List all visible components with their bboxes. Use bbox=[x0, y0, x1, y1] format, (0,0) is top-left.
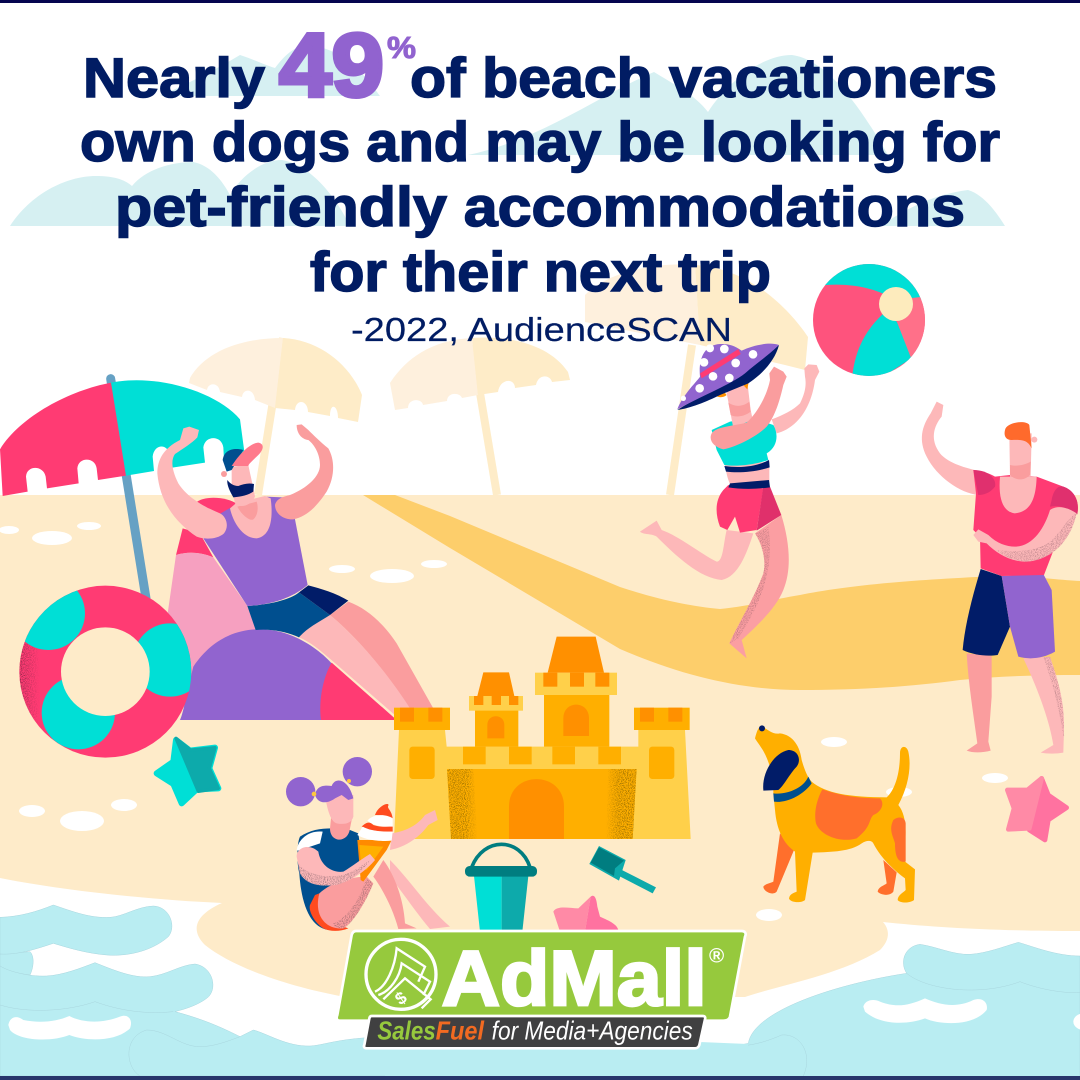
toy shovel bbox=[589, 846, 656, 893]
white wave right bbox=[863, 998, 987, 1023]
top border bar bbox=[0, 0, 1080, 3]
dog body bbox=[755, 726, 915, 902]
title line 1 start: Nearly bbox=[83, 46, 265, 109]
dog bbox=[755, 725, 915, 902]
man legs bbox=[299, 602, 433, 717]
bent arm bbox=[973, 507, 1077, 562]
wall crenels bbox=[463, 747, 621, 764]
man head bbox=[221, 443, 263, 506]
sun hat bbox=[677, 344, 779, 410]
circular money icon bbox=[366, 939, 436, 1009]
far arm bbox=[390, 810, 438, 850]
dog ear bbox=[763, 750, 799, 791]
sand castle bbox=[394, 637, 691, 839]
white wave left bbox=[8, 1016, 131, 1040]
man on beanbag scene bbox=[0, 379, 433, 803]
darker sand path bbox=[363, 495, 1080, 690]
back leg bbox=[640, 521, 753, 580]
neck and chest bbox=[330, 818, 352, 840]
neck and face bbox=[726, 377, 753, 428]
ocean right waves bbox=[740, 942, 1080, 1077]
near arm bbox=[297, 847, 375, 886]
big number 49 percent: 49 bbox=[279, 16, 384, 116]
dog collar bbox=[773, 777, 812, 802]
bucket bbox=[465, 844, 537, 932]
jumping woman bbox=[640, 344, 819, 658]
head and neck bbox=[1005, 422, 1037, 479]
pale background umbrella 3 bbox=[585, 264, 808, 495]
man shorts bbox=[247, 585, 348, 637]
AdMall logo bbox=[337, 931, 746, 1048]
shirt bbox=[973, 470, 1078, 576]
small center tower bbox=[469, 672, 523, 747]
dog nose bbox=[759, 725, 765, 731]
far arm bbox=[772, 364, 819, 433]
title bbox=[80, 16, 1000, 348]
title line 3: pet-friendly accommodations bbox=[115, 175, 965, 238]
left tower bbox=[394, 708, 450, 779]
shorts bbox=[963, 569, 1055, 658]
beach ball bbox=[813, 264, 925, 376]
shorts bbox=[717, 480, 781, 533]
front leg bbox=[729, 515, 789, 658]
pale background umbrella 2 bbox=[390, 337, 570, 495]
title line 2: own dogs and may be looking for bbox=[80, 110, 1000, 173]
top bbox=[712, 418, 777, 472]
sand beach bbox=[0, 495, 1080, 997]
man raised arm right bbox=[275, 424, 333, 519]
title line 1 end: of beach vacationers bbox=[410, 46, 997, 109]
man chest and neck bbox=[230, 496, 272, 538]
far leg bbox=[373, 860, 450, 929]
dog back legs bbox=[763, 833, 897, 895]
swimsuit bbox=[297, 828, 363, 930]
SalesFuel tagline: for Media+Agencies bbox=[492, 1015, 693, 1045]
SalesFuel tagline bbox=[377, 1015, 693, 1045]
hair bbox=[286, 757, 372, 806]
legs bbox=[967, 653, 1064, 754]
chest bbox=[1000, 477, 1037, 513]
bottom border bar bbox=[0, 1076, 1080, 1080]
castle main wall with gate bbox=[447, 769, 637, 839]
dark tagline bar bbox=[364, 1016, 705, 1048]
beach umbrella bbox=[0, 379, 245, 598]
hair ties bbox=[312, 779, 351, 796]
teal starfish bbox=[157, 738, 218, 803]
ocean bottom band bbox=[385, 1037, 748, 1076]
thigh bbox=[318, 877, 373, 928]
orange shorts bbox=[310, 893, 348, 931]
beanbag bbox=[168, 498, 415, 720]
dog spots bbox=[815, 789, 906, 862]
SalesFuel tagline: Sales bbox=[377, 1015, 436, 1045]
face bbox=[325, 795, 353, 824]
registered mark: ® bbox=[709, 945, 724, 968]
waist bbox=[725, 462, 769, 484]
right tower bbox=[634, 708, 690, 779]
green badge bbox=[337, 931, 746, 1021]
swim ring bbox=[19, 586, 192, 758]
sand pebbles bbox=[0, 522, 1008, 921]
AdMall wordmark: AdMall bbox=[442, 934, 707, 1022]
pink starfish bbox=[1007, 778, 1067, 840]
standing man bbox=[922, 402, 1078, 754]
white wave edge bbox=[1073, 1013, 1080, 1030]
big number 49 percent: % bbox=[387, 30, 416, 65]
raised arm bbox=[922, 402, 987, 495]
source line: -2022, AudienceSCAN bbox=[351, 311, 732, 348]
white sleeve bbox=[297, 831, 323, 851]
man tank top bbox=[203, 497, 308, 606]
background mountains bbox=[10, 45, 1005, 226]
castle walls bbox=[394, 730, 691, 839]
near arm bbox=[711, 367, 787, 449]
SalesFuel tagline: Fuel bbox=[436, 1015, 485, 1045]
pale background umbrella 1 bbox=[189, 338, 362, 495]
circular money icon: $ bbox=[391, 987, 411, 1009]
small pink starfish bbox=[553, 896, 618, 932]
title line 4: for their next trip bbox=[310, 240, 771, 303]
girl with ice cream bbox=[286, 757, 450, 931]
tall center tower bbox=[535, 637, 617, 747]
ocean left waves bbox=[0, 905, 400, 1076]
man raised arm left bbox=[157, 427, 227, 539]
ice cream bbox=[357, 804, 393, 882]
